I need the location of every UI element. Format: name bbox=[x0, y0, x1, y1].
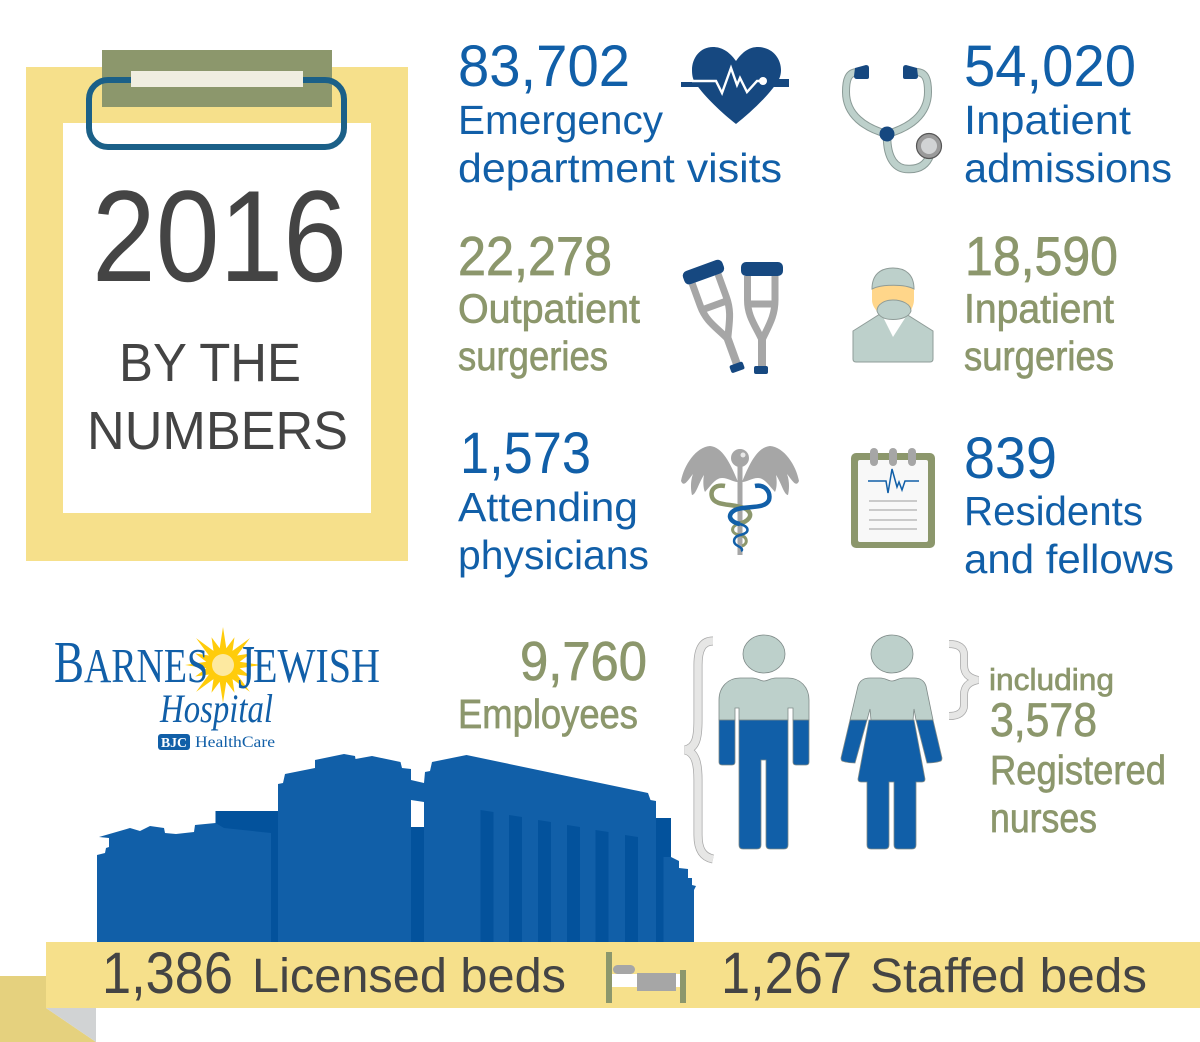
stat: outpatient surgeries: surgeries bbox=[458, 333, 608, 379]
logo: Barnes-Jewish Hospital: ARNES bbox=[84, 638, 208, 693]
logo: Barnes-Jewish Hospital: J bbox=[238, 634, 255, 702]
icon: crutches bbox=[681, 258, 783, 378]
stat: employees bbox=[458, 630, 647, 737]
stat: registered nurses: Registered bbox=[990, 747, 1166, 793]
stat: inpatient admissions: 54,020 bbox=[964, 34, 1136, 99]
logo: Barnes-Jewish Hospital: BJC bbox=[161, 736, 187, 751]
stat: outpatient surgeries: 22,278 bbox=[458, 225, 612, 287]
heading: by the: BY THE bbox=[119, 333, 301, 393]
bracket: employees bbox=[685, 641, 713, 859]
stat: staffed beds bbox=[721, 941, 1147, 1006]
stat: licensed beds: 1,386 bbox=[102, 941, 233, 1006]
stat: inpatient surgeries bbox=[964, 225, 1118, 379]
stat: attending physicians bbox=[458, 421, 649, 578]
stat: employees: Employees bbox=[458, 691, 638, 737]
illustration: hospital building bbox=[97, 754, 696, 942]
icon: heart with pulse bbox=[681, 47, 789, 124]
stat: emergency department visits: Emergency bbox=[458, 97, 663, 143]
icon: female figure bbox=[841, 635, 942, 849]
stat: registered nurses: 3,578 bbox=[990, 693, 1097, 746]
stat: residents and fellows: and fellows bbox=[964, 536, 1174, 582]
icon: bed bbox=[606, 952, 686, 1003]
stat: attending physicians: Attending bbox=[458, 484, 638, 530]
icon: surgeon bbox=[853, 268, 933, 362]
heading: year: 2016 bbox=[92, 163, 347, 309]
stat: outpatient surgeries: Outpatient bbox=[458, 286, 641, 332]
stat: staffed beds: Staffed beds bbox=[870, 950, 1147, 1003]
stat: inpatient surgeries: Inpatient bbox=[964, 286, 1115, 332]
stat: emergency department visits bbox=[458, 34, 782, 191]
stat: licensed beds: Licensed beds bbox=[252, 950, 566, 1003]
icon: male figure bbox=[719, 635, 809, 849]
icon: stethoscope bbox=[846, 65, 942, 169]
heading: numbers: NUMBERS bbox=[87, 401, 348, 461]
panel: clipboard bbox=[26, 50, 408, 561]
logo: Barnes-Jewish Hospital bbox=[54, 627, 380, 751]
stat: registered nurses bbox=[989, 662, 1166, 841]
stat: staffed beds: 1,267 bbox=[721, 941, 852, 1006]
stat: registered nurses: including bbox=[989, 662, 1114, 697]
stat: emergency department visits: department visits bbox=[458, 145, 782, 191]
stat: attending physicians: 1,573 bbox=[460, 421, 591, 486]
stat: registered nurses: nurses bbox=[990, 795, 1097, 841]
stat: emergency department visits: 83,702 bbox=[458, 34, 630, 99]
stat: residents and fellows: 839 bbox=[964, 426, 1057, 491]
stat: attending physicians: physicians bbox=[458, 532, 649, 578]
ribbon: beds bbox=[0, 941, 1200, 1042]
stat: inpatient surgeries: surgeries bbox=[964, 333, 1114, 379]
stat: inpatient admissions: admissions bbox=[964, 145, 1172, 191]
logo: Barnes-Jewish Hospital: EWISH bbox=[253, 638, 380, 693]
stat: inpatient admissions: Inpatient bbox=[964, 97, 1132, 143]
logo: Barnes-Jewish Hospital: B bbox=[54, 629, 84, 695]
stat: employees: 9,760 bbox=[520, 630, 647, 692]
icon: notepad chart bbox=[851, 448, 935, 548]
logo: Barnes-Jewish Hospital: Hospital bbox=[159, 686, 273, 731]
stat: licensed beds bbox=[102, 941, 566, 1006]
logo: Barnes-Jewish Hospital: HealthCare bbox=[195, 734, 275, 751]
icon: caduceus bbox=[681, 446, 799, 555]
icon: sun bbox=[185, 627, 261, 703]
stat: inpatient surgeries: 18,590 bbox=[965, 225, 1118, 287]
bracket: nurses bbox=[949, 644, 978, 716]
stat: inpatient admissions bbox=[964, 34, 1172, 191]
stat: outpatient surgeries bbox=[458, 225, 641, 379]
stat: residents and fellows bbox=[964, 426, 1174, 582]
stat: residents and fellows: Residents bbox=[964, 488, 1143, 534]
